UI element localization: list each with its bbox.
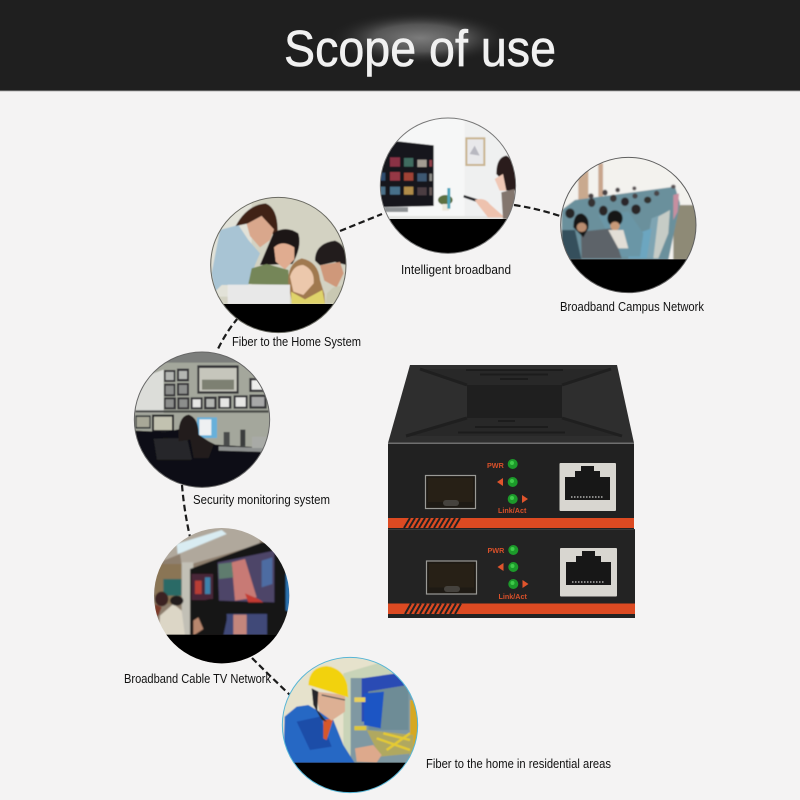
- dashed connectors: [182, 205, 563, 695]
- SFP port: [426, 561, 476, 594]
- photo: campus computer classroom: [560, 156, 696, 294]
- label: Broadband Campus Network: Broadband Campus Network: [560, 299, 704, 314]
- photo: cable TV video wall: [154, 528, 290, 664]
- photo: TV in a living room: [380, 118, 516, 254]
- status LEDs: PWR: [487, 461, 505, 470]
- label: Fiber to the home in residential areas: Fiber to the home in residential areas: [426, 756, 611, 771]
- product: stacked media converters: [388, 365, 635, 618]
- orange stripe: [388, 604, 635, 614]
- photo: security monitoring room: [134, 352, 270, 488]
- status LEDs: PWR: [488, 546, 505, 555]
- RJ45 port: [560, 463, 616, 511]
- status LEDs: Link/Act: [498, 506, 527, 515]
- title: Scope of use: [284, 20, 556, 77]
- orange stripe: [388, 518, 634, 528]
- SFP port: [426, 476, 476, 508]
- top case: [388, 365, 634, 444]
- photo: technician at a fiber cabinet: [282, 656, 418, 794]
- label: Intelligent broadband: Intelligent broadband: [401, 262, 511, 277]
- header band: [0, 0, 800, 91]
- lower unit: [388, 529, 635, 618]
- status LEDs: [487, 459, 528, 515]
- status LEDs: Link/Act: [498, 592, 527, 601]
- photo: family at a laptop: [210, 196, 346, 334]
- RJ45 port: [560, 548, 617, 596]
- status LEDs: [488, 545, 528, 601]
- upper unit: [388, 444, 634, 529]
- label: Broadband Cable TV Network: Broadband Cable TV Network: [124, 671, 271, 686]
- label: Fiber to the Home System: Fiber to the Home System: [232, 334, 361, 349]
- label: Security monitoring system: Security monitoring system: [193, 492, 330, 507]
